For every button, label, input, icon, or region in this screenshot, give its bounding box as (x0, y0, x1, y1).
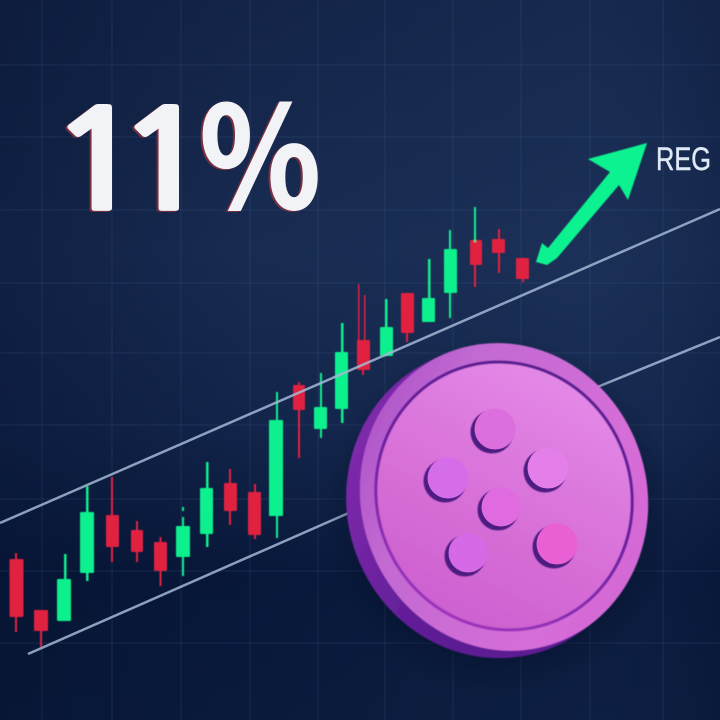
coin rim (320, 305, 688, 689)
coin (306, 305, 688, 697)
arrow: green up-trend (536, 143, 647, 265)
lower channel line (28, 337, 720, 654)
headline: 11% (45, 47, 321, 250)
headline: 11%: 1 (47, 94, 149, 230)
coin dots (424, 408, 578, 576)
headline: 11%: 1 (114, 94, 216, 230)
candlestick chart (10, 207, 529, 647)
headline: 11%: % (200, 47, 321, 249)
coin face (336, 323, 672, 669)
coin edge (306, 309, 682, 697)
headline: 11%: 1 (112, 95, 214, 231)
upper channel line (0, 209, 720, 523)
headline: 11%: 1 (45, 95, 147, 231)
headline: 11%: % (198, 48, 319, 250)
